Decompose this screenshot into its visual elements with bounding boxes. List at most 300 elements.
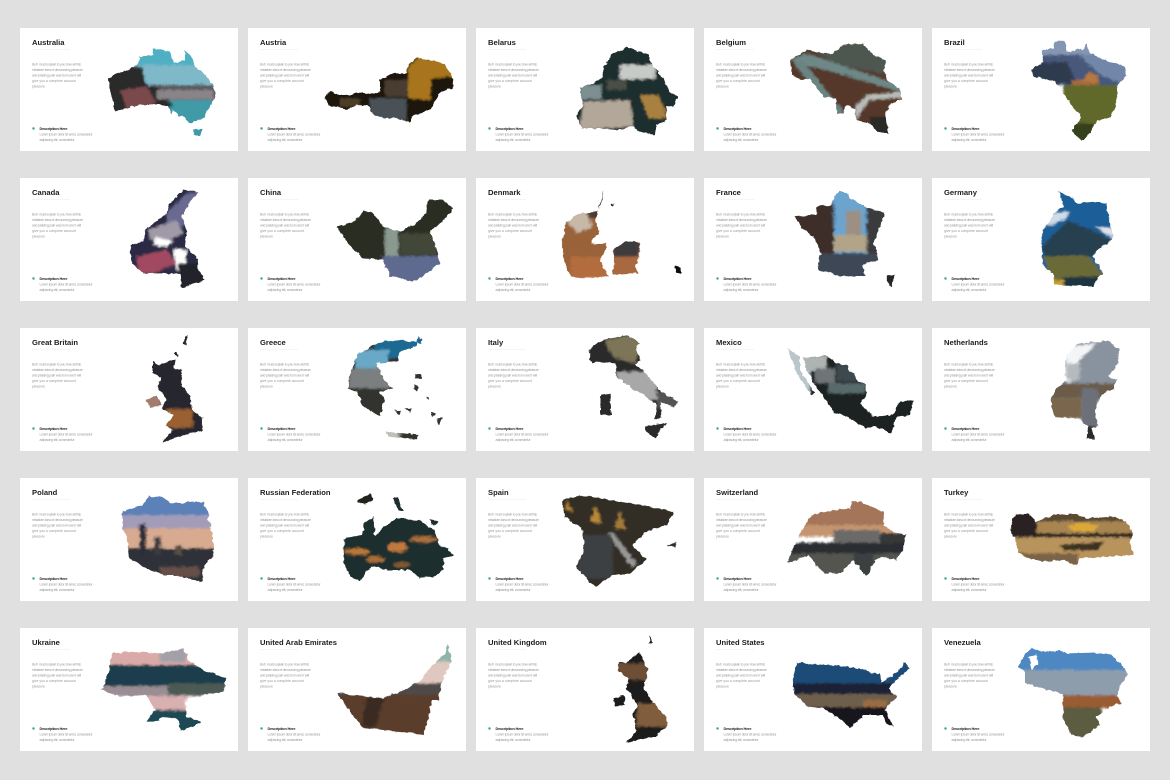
description item: Description Here: [40, 727, 68, 731]
text block: body: and praising pain was born and I will: [32, 674, 81, 678]
text block: body: mistaken idea of denouncing pleasure: [32, 218, 83, 222]
heading: Denmark: Denmark: [488, 188, 521, 197]
text block: body: [944, 362, 995, 388]
text block: body: give you a complete account: [716, 679, 760, 683]
panel: Spain: [476, 478, 694, 601]
text block: body: and praising pain was born and I will: [260, 524, 309, 528]
description item: Description Here: [40, 277, 68, 281]
heading: Germany: Germany: [944, 188, 978, 197]
panel: Ukraine: [20, 628, 238, 751]
panel: Mexico: [704, 328, 922, 451]
description item: Lorem ipsum dolor sit amet, consectetur: [952, 432, 1005, 436]
text block: body: [488, 62, 539, 88]
text block: body: mistaken idea of denouncing pleasure: [944, 518, 995, 522]
text block: body: mistaken idea of denouncing pleasure: [32, 518, 83, 522]
description item: adipiscing elit, consectetur: [496, 138, 531, 142]
text block: body: [260, 512, 311, 538]
description item: Lorem ipsum dolor sit amet, consectetur: [40, 132, 93, 136]
description item: Description Here: [496, 427, 524, 431]
text block: body: But I must explain to you how all this: [716, 62, 765, 66]
description item: [32, 127, 93, 142]
description item: adipiscing elit, consectetur: [952, 138, 987, 142]
text block: body: But I must explain to you how all this: [32, 62, 81, 66]
description item: Lorem ipsum dolor sit amet, consectetur: [40, 282, 93, 286]
description item: Description Here: [496, 277, 524, 281]
description item: [944, 127, 1005, 142]
description item: Description Here: [952, 277, 980, 281]
text block: body: give you a complete account: [260, 229, 304, 233]
text block: body: [488, 662, 539, 688]
panel: Denmark: [476, 178, 694, 301]
panel: Germany: [932, 178, 1150, 301]
description item: [32, 277, 93, 292]
text block: body: mistaken idea of denouncing pleasure: [716, 218, 767, 222]
description item: adipiscing elit, consectetur: [724, 738, 759, 742]
map: Turkey: [1008, 512, 1135, 567]
text block: body: and praising pain was born and I will: [944, 224, 993, 228]
panel: Canada: [20, 178, 238, 301]
text block: body: give you a complete account: [32, 529, 76, 533]
map: Russian Federation: [342, 493, 457, 583]
description item: [488, 427, 549, 442]
description item: Lorem ipsum dolor sit amet, consectetur: [724, 282, 777, 286]
description item: [488, 727, 549, 742]
map: Italy: [586, 333, 679, 440]
description item: Description Here: [724, 427, 752, 431]
description item: adipiscing elit, consectetur: [40, 588, 75, 592]
text block: body: [488, 362, 539, 388]
text block: body: and praising pain was born and I will: [488, 674, 537, 678]
map: Belgium: [788, 43, 903, 135]
text block: body: pleasure: [488, 234, 501, 238]
heading: United Arab Emirates: United Arab Emirates: [260, 638, 337, 647]
text block: body: and praising pain was born and I will: [488, 374, 537, 378]
description item: Lorem ipsum dolor sit amet, consectetur: [496, 282, 549, 286]
text block: body: But I must explain to you how all this: [260, 662, 309, 666]
description item: Lorem ipsum dolor sit amet, consectetur: [268, 732, 321, 736]
heading: United States: United States: [716, 638, 765, 647]
panel: Brazil: [932, 28, 1150, 151]
description item: [488, 127, 549, 142]
description item: adipiscing elit, consectetur: [952, 288, 987, 292]
text block: body: and praising pain was born and I will: [716, 674, 765, 678]
text block: body: mistaken idea of denouncing pleasure: [944, 368, 995, 372]
text block: body: [716, 62, 767, 88]
description item: [32, 727, 93, 742]
panel: Austria: [248, 28, 466, 151]
description item: [716, 277, 777, 292]
description item: Lorem ipsum dolor sit amet, consectetur: [724, 582, 777, 586]
description item: Lorem ipsum dolor sit amet, consectetur: [496, 132, 549, 136]
text block: body: give you a complete account: [944, 529, 988, 533]
text block: body: [32, 362, 83, 388]
description item: adipiscing elit, consectetur: [40, 288, 75, 292]
text block: body: [944, 662, 995, 688]
text block: body: pleasure: [716, 684, 729, 688]
text block: body: and praising pain was born and I will: [260, 374, 309, 378]
description item: Lorem ipsum dolor sit amet, consectetur: [268, 132, 321, 136]
text block: body: mistaken idea of denouncing pleasure: [488, 218, 539, 222]
text block: body: and praising pain was born and I will: [488, 74, 537, 78]
description item: Description Here: [724, 127, 752, 131]
text block: body: mistaken idea of denouncing pleasure: [488, 668, 539, 672]
description item: Description Here: [724, 577, 752, 581]
map: Spain: [560, 493, 677, 588]
text block: body: give you a complete account: [260, 679, 304, 683]
panel: Great Britain: [20, 328, 238, 451]
text block: body: and praising pain was born and I will: [260, 224, 309, 228]
description item: adipiscing elit, consectetur: [952, 588, 987, 592]
panel: Italy: [476, 328, 694, 451]
text block: body: pleasure: [260, 384, 273, 388]
panel: Poland: [20, 478, 238, 601]
panel: Greece: [248, 328, 466, 451]
heading: Brazil: Brazil: [944, 38, 965, 47]
text block: body: mistaken idea of denouncing pleasure: [716, 518, 767, 522]
panel: Russian Federation: [248, 478, 466, 601]
heading: Russian Federation: Russian Federation: [260, 488, 331, 497]
text block: body: mistaken idea of denouncing pleasure: [32, 368, 83, 372]
text block: body: mistaken idea of denouncing pleasure: [260, 68, 311, 72]
text block: body: But I must explain to you how all this: [32, 212, 81, 216]
text block: body: pleasure: [32, 684, 45, 688]
description item: adipiscing elit, consectetur: [496, 738, 531, 742]
text block: body: and praising pain was born and I will: [32, 374, 81, 378]
description item: [32, 577, 93, 592]
text block: body: pleasure: [716, 534, 729, 538]
description item: Description Here: [40, 577, 68, 581]
description item: [716, 127, 777, 142]
map: Denmark: [562, 188, 684, 278]
text block: body: mistaken idea of denouncing pleasure: [260, 518, 311, 522]
text block: body: mistaken idea of denouncing pleasure: [260, 668, 311, 672]
heading: Italy: Italy: [488, 338, 504, 347]
description item: [488, 277, 549, 292]
text block: body: and praising pain was born and I will: [32, 74, 81, 78]
map: Belarus: [575, 45, 680, 137]
description item: Description Here: [952, 727, 980, 731]
description item: Description Here: [40, 427, 68, 431]
description item: [32, 427, 93, 442]
text block: body: and praising pain was born and I will: [716, 374, 765, 378]
heading: France: France: [716, 188, 741, 197]
text block: body: mistaken idea of denouncing pleasure: [488, 368, 539, 372]
text block: body: pleasure: [32, 384, 45, 388]
heading: United Kingdom: United Kingdom: [488, 638, 547, 647]
description item: adipiscing elit, consectetur: [496, 438, 531, 442]
text block: body: [32, 212, 83, 238]
description item: adipiscing elit, consectetur: [724, 288, 759, 292]
text block: body: But I must explain to you how all this: [716, 362, 765, 366]
description item: Description Here: [952, 427, 980, 431]
text block: body: mistaken idea of denouncing pleasure: [944, 218, 995, 222]
text block: body: pleasure: [944, 84, 957, 88]
text block: body: pleasure: [944, 534, 957, 538]
description item: adipiscing elit, consectetur: [40, 138, 75, 142]
text block: body: [32, 512, 83, 538]
map: Austria: [323, 57, 455, 123]
heading: Netherlands: Netherlands: [944, 338, 988, 347]
text block: body: and praising pain was born and I will: [716, 524, 765, 528]
text block: body: and praising pain was born and I will: [944, 74, 993, 78]
description item: adipiscing elit, consectetur: [268, 738, 303, 742]
text block: body: and praising pain was born and I will: [32, 524, 81, 528]
text block: body: But I must explain to you how all this: [944, 362, 993, 366]
panel: United Arab Emirates: [248, 628, 466, 751]
text block: body: give you a complete account: [716, 529, 760, 533]
description item: [944, 577, 1005, 592]
map: China: [335, 198, 455, 283]
text block: body: pleasure: [32, 534, 45, 538]
description item: Lorem ipsum dolor sit amet, consectetur: [268, 282, 321, 286]
text block: body: pleasure: [488, 84, 501, 88]
description item: [260, 127, 321, 142]
text block: body: give you a complete account: [32, 79, 76, 83]
text block: body: [716, 662, 767, 688]
text block: body: pleasure: [488, 384, 501, 388]
text block: body: But I must explain to you how all this: [260, 212, 309, 216]
description item: [716, 577, 777, 592]
text block: body: pleasure: [716, 84, 729, 88]
text block: body: pleasure: [260, 234, 273, 238]
heading: China: China: [260, 188, 282, 197]
description item: adipiscing elit, consectetur: [496, 588, 531, 592]
panel: Belarus: [476, 28, 694, 151]
description item: adipiscing elit, consectetur: [724, 438, 759, 442]
text block: body: give you a complete account: [488, 379, 532, 383]
map: Netherlands: [1048, 340, 1120, 440]
text block: body: But I must explain to you how all this: [944, 512, 993, 516]
text block: body: [260, 62, 311, 88]
text block: body: and praising pain was born and I will: [944, 674, 993, 678]
map: Poland: [120, 495, 215, 583]
map: United Arab Emirates: [336, 642, 454, 737]
heading: Poland: Poland: [32, 488, 58, 497]
description item: adipiscing elit, consectetur: [40, 438, 75, 442]
description item: Lorem ipsum dolor sit amet, consectetur: [952, 282, 1005, 286]
panel: United Kingdom: [476, 628, 694, 751]
text block: body: pleasure: [32, 234, 45, 238]
text block: body: give you a complete account: [716, 79, 760, 83]
description item: adipiscing elit, consectetur: [40, 738, 75, 742]
map: Switzerland: [786, 500, 908, 577]
text block: body: and praising pain was born and I will: [32, 224, 81, 228]
description item: [260, 577, 321, 592]
description item: Description Here: [952, 127, 980, 131]
text block: body: mistaken idea of denouncing pleasure: [32, 68, 83, 72]
text block: body: give you a complete account: [260, 79, 304, 83]
text block: body: mistaken idea of denouncing pleasure: [488, 68, 539, 72]
panel: Switzerland: [704, 478, 922, 601]
description item: adipiscing elit, consectetur: [952, 438, 987, 442]
map: Australia: [107, 47, 218, 137]
description item: adipiscing elit, consectetur: [724, 588, 759, 592]
text block: body: mistaken idea of denouncing pleasure: [260, 218, 311, 222]
text block: body: But I must explain to you how all this: [944, 62, 993, 66]
map: Canada: [128, 188, 207, 288]
description item: Lorem ipsum dolor sit amet, consectetur: [40, 432, 93, 436]
text block: body: pleasure: [260, 84, 273, 88]
text block: body: and praising pain was born and I will: [488, 524, 537, 528]
text block: body: pleasure: [716, 234, 729, 238]
text block: body: [32, 62, 83, 88]
description item: [944, 427, 1005, 442]
description item: adipiscing elit, consectetur: [268, 438, 303, 442]
text block: body: give you a complete account: [716, 379, 760, 383]
text block: body: and praising pain was born and I will: [944, 374, 993, 378]
map: United Kingdom: [611, 633, 668, 743]
description item: Lorem ipsum dolor sit amet, consectetur: [952, 732, 1005, 736]
text block: body: give you a complete account: [488, 529, 532, 533]
text block: body: mistaken idea of denouncing pleasure: [944, 68, 995, 72]
text block: body: But I must explain to you how all this: [260, 512, 309, 516]
description item: Lorem ipsum dolor sit amet, consectetur: [496, 732, 549, 736]
map: Ukraine: [100, 647, 228, 732]
description item: Description Here: [268, 127, 296, 131]
description item: Description Here: [40, 127, 68, 131]
text block: body: and praising pain was born and I will: [716, 74, 765, 78]
text block: body: pleasure: [944, 384, 957, 388]
description item: adipiscing elit, consectetur: [268, 288, 303, 292]
heading: Australia: Australia: [32, 38, 65, 47]
description item: [260, 277, 321, 292]
description item: Lorem ipsum dolor sit amet, consectetur: [268, 432, 321, 436]
text block: body: [944, 212, 995, 238]
text block: body: mistaken idea of denouncing pleasure: [716, 368, 767, 372]
description item: Description Here: [268, 727, 296, 731]
text block: body: [716, 212, 767, 238]
text block: body: [260, 212, 311, 238]
text block: body: But I must explain to you how all this: [488, 362, 537, 366]
text block: body: give you a complete account: [32, 229, 76, 233]
text block: body: mistaken idea of denouncing pleasure: [32, 668, 83, 672]
description item: Description Here: [724, 277, 752, 281]
panel: Belgium: [704, 28, 922, 151]
description item: [944, 277, 1005, 292]
description item: Description Here: [496, 127, 524, 131]
text block: body: pleasure: [260, 534, 273, 538]
text block: body: But I must explain to you how all this: [488, 512, 537, 516]
text block: body: But I must explain to you how all this: [260, 362, 309, 366]
description item: adipiscing elit, consectetur: [268, 138, 303, 142]
text block: body: [260, 662, 311, 688]
text block: body: pleasure: [944, 234, 957, 238]
text block: body: But I must explain to you how all this: [32, 662, 81, 666]
text block: body: pleasure: [260, 684, 273, 688]
description item: Lorem ipsum dolor sit amet, consectetur: [496, 432, 549, 436]
heading: Belarus: Belarus: [488, 38, 516, 47]
text block: body: [944, 512, 995, 538]
description item: Description Here: [496, 577, 524, 581]
description item: Lorem ipsum dolor sit amet, consectetur: [952, 132, 1005, 136]
text block: body: mistaken idea of denouncing pleasure: [716, 68, 767, 72]
text block: body: and praising pain was born and I will: [260, 74, 309, 78]
map: Great Britain: [144, 334, 204, 444]
text block: body: mistaken idea of denouncing pleasure: [260, 368, 311, 372]
heading: Canada: Canada: [32, 188, 60, 197]
description item: adipiscing elit, consectetur: [724, 138, 759, 142]
text block: body: [260, 362, 311, 388]
map: Germany: [1039, 190, 1115, 288]
text block: body: pleasure: [716, 384, 729, 388]
heading: Great Britain: Great Britain: [32, 338, 78, 347]
text block: body: But I must explain to you how all this: [944, 662, 993, 666]
text block: body: pleasure: [488, 684, 501, 688]
text block: body: mistaken idea of denouncing pleasure: [488, 518, 539, 522]
text block: body: give you a complete account: [32, 679, 76, 683]
description item: [488, 577, 549, 592]
panel: France: [704, 178, 922, 301]
heading: Ukraine: Ukraine: [32, 638, 60, 647]
heading: Switzerland: Switzerland: [716, 488, 759, 497]
map: Venezuela: [1017, 647, 1130, 737]
text block: body: and praising pain was born and I will: [944, 524, 993, 528]
text block: body: But I must explain to you how all this: [488, 662, 537, 666]
map: France: [794, 189, 896, 289]
description item: Lorem ipsum dolor sit amet, consectetur: [724, 132, 777, 136]
text block: body: give you a complete account: [944, 79, 988, 83]
text block: body: [716, 362, 767, 388]
description item: Description Here: [268, 277, 296, 281]
description item: adipiscing elit, consectetur: [952, 738, 987, 742]
map: Brazil: [1030, 40, 1128, 143]
text block: body: give you a complete account: [260, 529, 304, 533]
text block: body: give you a complete account: [944, 679, 988, 683]
text block: body: But I must explain to you how all this: [488, 62, 537, 66]
text block: body: give you a complete account: [944, 379, 988, 383]
text block: body: But I must explain to you how all this: [260, 62, 309, 66]
map: United States: [792, 660, 910, 729]
description item: Lorem ipsum dolor sit amet, consectetur: [496, 582, 549, 586]
heading: Venezuela: Venezuela: [944, 638, 981, 647]
description item: [260, 727, 321, 742]
description item: adipiscing elit, consectetur: [268, 588, 303, 592]
description item: Lorem ipsum dolor sit amet, consectetur: [724, 732, 777, 736]
text block: body: give you a complete account: [260, 379, 304, 383]
text block: body: [716, 512, 767, 538]
description item: Lorem ipsum dolor sit amet, consectetur: [952, 582, 1005, 586]
heading: Austria: Austria: [260, 38, 287, 47]
description item: [716, 427, 777, 442]
text block: body: give you a complete account: [488, 679, 532, 683]
text block: body: But I must explain to you how all this: [32, 362, 81, 366]
panel: Venezuela: [932, 628, 1150, 751]
description item: Description Here: [268, 427, 296, 431]
text block: body: But I must explain to you how all this: [716, 212, 765, 216]
panel: Turkey: [932, 478, 1150, 601]
description item: adipiscing elit, consectetur: [496, 288, 531, 292]
panel: Netherlands: [932, 328, 1150, 451]
text block: body: But I must explain to you how all this: [716, 662, 765, 666]
text block: body: But I must explain to you how all this: [488, 212, 537, 216]
text block: body: pleasure: [944, 684, 957, 688]
text block: body: and praising pain was born and I will: [716, 224, 765, 228]
heading: Mexico: Mexico: [716, 338, 742, 347]
text block: body: give you a complete account: [32, 379, 76, 383]
text block: body: give you a complete account: [488, 79, 532, 83]
description item: [260, 427, 321, 442]
text block: body: [488, 512, 539, 538]
text block: body: mistaken idea of denouncing pleasure: [944, 668, 995, 672]
panel: United States: [704, 628, 922, 751]
description item: Lorem ipsum dolor sit amet, consectetur: [40, 582, 93, 586]
map: Mexico: [785, 347, 915, 435]
text block: body: give you a complete account: [944, 229, 988, 233]
description item: Lorem ipsum dolor sit amet, consectetur: [724, 432, 777, 436]
text block: body: But I must explain to you how all this: [944, 212, 993, 216]
description item: Description Here: [496, 727, 524, 731]
description item: [944, 727, 1005, 742]
